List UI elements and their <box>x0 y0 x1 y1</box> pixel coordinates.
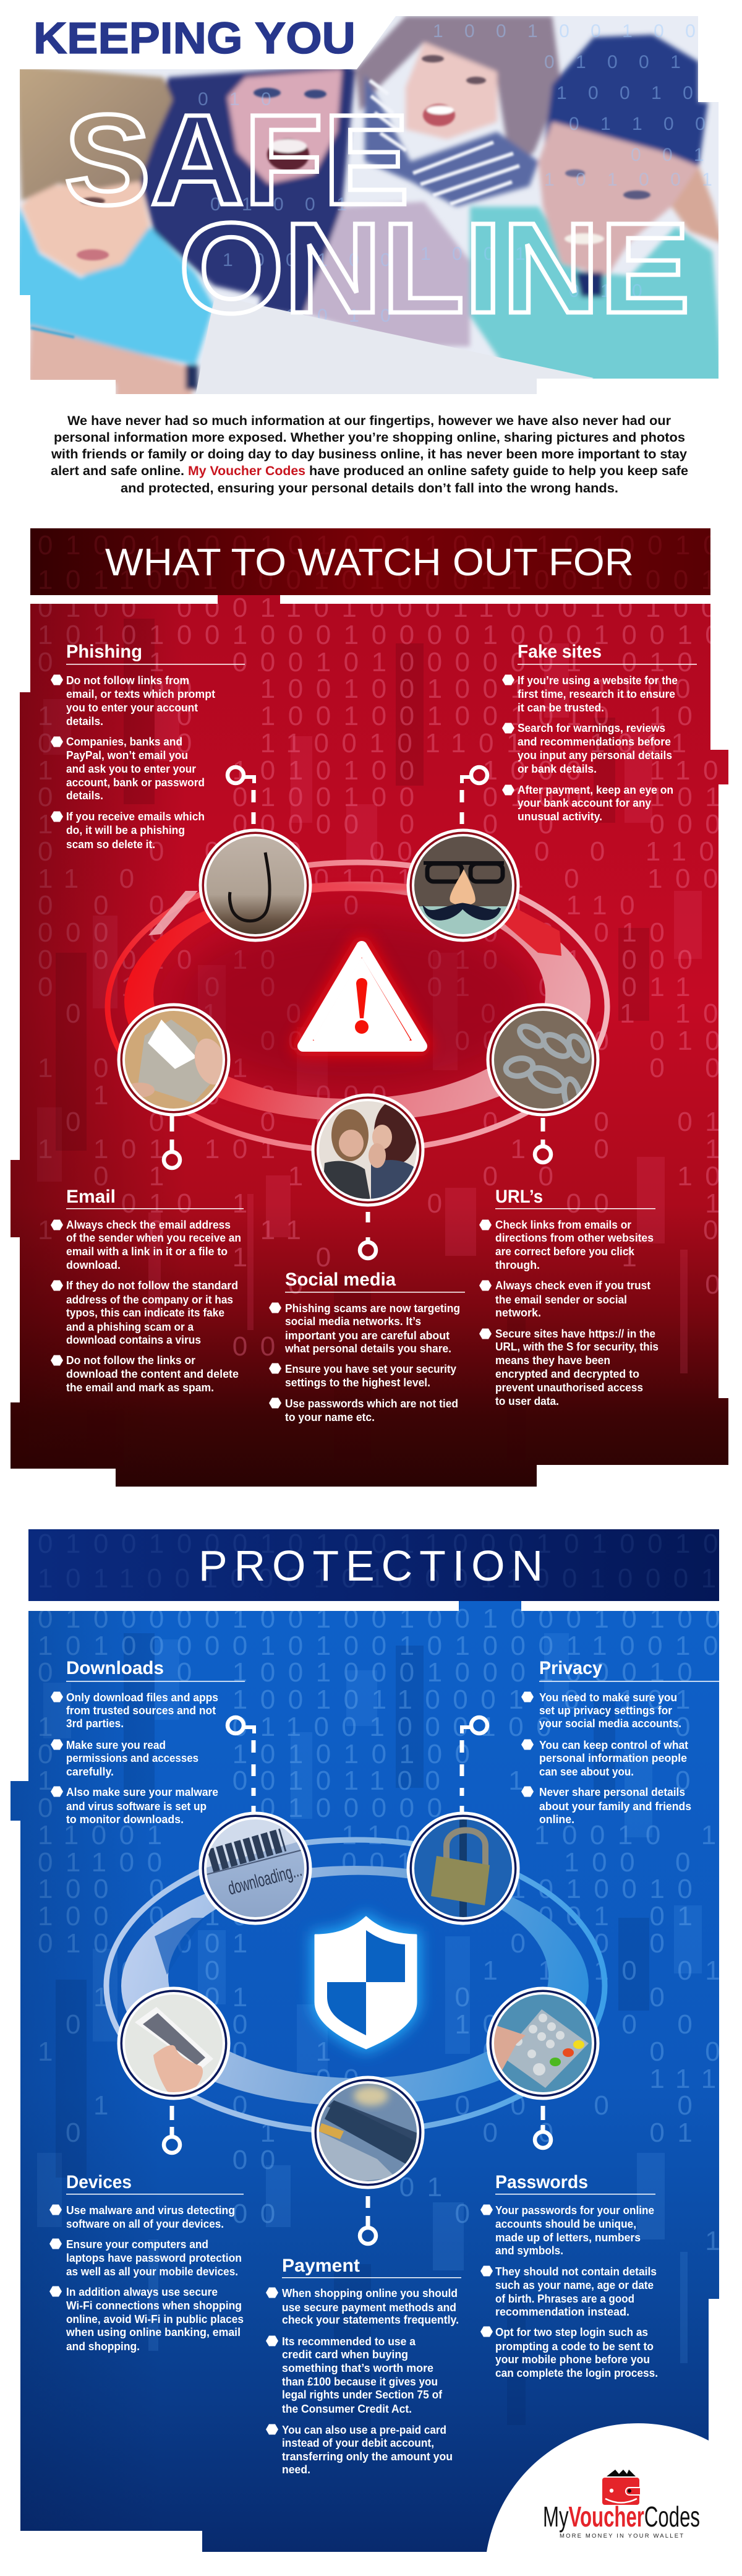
text block: fake sites <box>502 642 697 823</box>
panel: what to watch out for background: 1 0 11 0 <box>38 1215 731 1245</box>
text block: social media: what personal details you share. <box>284 1342 451 1355</box>
intro paragraph: We have never had so much information at our fingertips, however we have also never had our <box>67 414 671 428</box>
mother's dark hair <box>140 65 356 298</box>
text block: social media: Social media <box>285 1269 396 1290</box>
text block: privacy: set up privacy settings for <box>539 1704 672 1717</box>
hero photo with family: 0 1 0 0 1 <box>210 194 355 215</box>
photo circle: email envelope <box>119 1005 231 1115</box>
text block: passwords: of birth. Phrases are a good <box>495 2292 634 2305</box>
panel: protection background: 0100000100100100100010100 <box>38 1604 733 1634</box>
text block: email: Always check the email address <box>66 1218 231 1231</box>
panel: protection background: 00 0 <box>38 2199 733 2229</box>
connector: privacy <box>462 1717 487 1813</box>
text block: payment: something that’s worth more <box>282 2361 433 2374</box>
photo circle: fake disguise <box>408 830 519 940</box>
panel: protection background: 1010000010100101000110010 <box>38 1631 731 1661</box>
panel: what to watch out for background: 0 0100100 0100 101 <box>38 782 733 812</box>
text block: payment: use secure payment methods and <box>282 2301 456 2314</box>
text block: fake sites: Search for warnings, reviews <box>518 721 665 734</box>
laptop <box>195 298 594 396</box>
text block: downloads: permissions and accesses <box>66 1751 198 1764</box>
text block: devices: Use malware and virus detecting <box>66 2204 235 2217</box>
panel: protection background: 0 101010100 <box>38 1739 677 1769</box>
text block: email: address of the company or it has <box>66 1293 233 1306</box>
text block: devices: as well as all your mobile devices. <box>66 2265 238 2278</box>
panel: what to watch out for background: 0 0 0 0 0 0 1 110 <box>38 890 647 921</box>
hero photo with family: 1 0 0 1 0 0 1 0 0 1 <box>433 21 735 41</box>
hero photo with family: 1 0 0 1 <box>420 244 534 264</box>
text block: phishing: scam so delete it. <box>66 838 155 851</box>
logo: my voucher codes: MORE MONEY IN YOUR WALLET <box>560 2533 683 2540</box>
text block: email: of the sender when you receive an <box>66 1231 241 1244</box>
panel: protection background: 0 0 00 111 <box>38 2064 729 2094</box>
text block: urls: to user data. <box>495 1394 559 1407</box>
shield icon <box>315 1917 416 2048</box>
connector: passwords <box>535 2106 551 2148</box>
text block: fake sites: or bank details. <box>518 762 597 775</box>
text block: email: Email <box>66 1187 116 1207</box>
text block: devices: Devices <box>66 2172 132 2192</box>
text block: payment: When shopping online you should <box>282 2286 458 2299</box>
panel: protection background: 1011001000101000110010001 <box>38 1563 729 1594</box>
text block: fake sites: you input any personal details <box>518 749 672 762</box>
panel: protection background: 0 0100000 <box>38 1793 705 1823</box>
panel: protection background: 00 <box>38 2145 705 2175</box>
text block: passwords: Passwords <box>495 2172 588 2192</box>
intro paragraph: My Voucher Codes <box>188 464 305 478</box>
text block: downloads: Only download files and apps <box>66 1691 218 1704</box>
text block: passwords: Your passwords for your online <box>495 2204 654 2217</box>
text block: devices: when using online banking, email <box>66 2325 241 2338</box>
title: keeping you: KEEPING YOU <box>33 14 356 63</box>
panel: protection background: 01 0 1 1 10 01 <box>38 1956 733 1986</box>
text block: passwords <box>480 2172 658 2379</box>
text block: social media: Use passwords which are not tied <box>285 1397 458 1410</box>
connector: fake sites <box>462 767 487 824</box>
text block: urls: Check links from emails or <box>495 1218 631 1231</box>
text block: privacy: You need to make sure you <box>539 1691 677 1704</box>
connector: email <box>164 1113 180 1168</box>
logo: my voucher codes <box>543 2470 700 2540</box>
panel: protection background: 1 00101100 1 0 <box>38 1766 703 1796</box>
text block: social media: social media networks. It’s <box>285 1315 421 1328</box>
text block: payment: transferring only the amount you <box>282 2450 453 2463</box>
text block: phishing: Companies, banks and <box>66 735 182 748</box>
text block: fake sites: it can be trusted. <box>518 701 604 714</box>
ring arrows: red <box>108 862 607 1151</box>
text block: phishing: account, bank or password <box>66 776 205 789</box>
text block: devices: online, avoid Wi-Fi in public places <box>66 2312 244 2325</box>
text block: privacy: your social media accounts. <box>539 1717 681 1730</box>
text block: passwords: can complete the login process. <box>495 2366 658 2379</box>
photo circle: downloading bar: downloading... <box>226 1860 304 1899</box>
text block: payment <box>266 2256 461 2476</box>
text block: payment: You can also use a pre-paid card <box>282 2423 446 2436</box>
intro paragraph: and protected, ensuring your personal details don’t fall into the wrong hands. <box>121 481 618 496</box>
intro paragraph: personal information more exposed. Whether you’re shopping online, sharing pictures and photos <box>54 431 685 445</box>
panel: protection background: 0 010 100 1 0 0 <box>38 2009 733 2040</box>
text block: phishing: Do not follow links from <box>66 674 189 687</box>
ring arrows: blue <box>106 1840 605 2132</box>
text block: urls: Always check even if you trust <box>495 1279 650 1292</box>
text block: privacy: You can keep control of what <box>539 1738 688 1751</box>
text block: urls: directions from other websites <box>495 1231 654 1244</box>
text block: downloads: to monitor downloads. <box>66 1813 184 1826</box>
heading: protection: PROTECTION <box>198 1542 543 1590</box>
text block: passwords: recommendation instead. <box>495 2305 629 2318</box>
text block: email: the email and mark as spam. <box>66 1381 214 1394</box>
logo: my voucher codes: MyVoucherCodes <box>543 2501 700 2533</box>
panel: what to watch out for background: 1 1010100 1000 110 <box>38 755 731 786</box>
panel: what to watch out for background: 0100 00011010001100010100 <box>38 593 729 623</box>
photo circle: two women whispering <box>313 1095 424 1205</box>
text block: devices: and shopping. <box>66 2340 140 2353</box>
text block: email: download. <box>66 1258 121 1271</box>
text block: payment: Payment <box>282 2256 360 2276</box>
text block: phishing: you to enter your account <box>66 701 198 714</box>
text block: email: typos, this can indicate its fake <box>66 1306 224 1319</box>
panel: what to watch out for background: 11 0 000101 1 0 100 <box>38 864 731 894</box>
text block: payment: legal rights under Section 75 of <box>282 2388 443 2401</box>
panel: protection background: 1 1 01 0 1 0 <box>38 1982 733 2012</box>
text block: payment: the Consumer Credit Act. <box>282 2402 412 2415</box>
text block: payment: credit card when buying <box>282 2348 408 2361</box>
intro paragraph: with friends or family or doing day to day business online, it has never been more important to stay <box>51 447 687 462</box>
text block: urls: encrypted and decrypted to <box>495 1367 639 1380</box>
panel: what to watch out for background: 1 0 1 0 0 0 0 <box>38 1053 733 1083</box>
panel: protection background: 1 011001000100 0 <box>38 1712 703 1742</box>
panel: what to watch out for background: 1 100 1001001001 1100 <box>38 674 703 704</box>
connector: devices <box>164 2106 180 2153</box>
panel: protection background: 010 1001 0 0 0 <box>38 1928 677 1959</box>
text block: fake sites: Fake sites <box>518 642 602 662</box>
panel: what to watch out for background: 1 00000 0 0 0 000 <box>38 809 733 839</box>
text block: privacy: Privacy <box>539 1658 602 1678</box>
connector: downloads <box>228 1717 254 1813</box>
panel: what to watch out for background: 0 1 0 0 01 0 011 <box>38 972 703 1002</box>
title: safe: SAFE <box>64 88 409 232</box>
text block: phishing: do, it will be a phishing <box>66 823 185 836</box>
text block: fake sites: unusual activity. <box>518 810 602 823</box>
text block: privacy <box>521 1658 719 1826</box>
title: online: ONLINE <box>179 197 690 340</box>
panel: what to watch out for background <box>0 526 742 1491</box>
text block: privacy: can see about you. <box>539 1765 634 1778</box>
text block: urls: through. <box>495 1258 540 1271</box>
text block: email <box>51 1187 244 1394</box>
panel: what to watch out for background: 0 0 0 00 0 0 01 <box>38 1107 733 1137</box>
panel: what to watch out for background: 1010100100010000100010010 <box>38 620 733 650</box>
panel: protection background: 01 <box>38 2172 705 2202</box>
text block: payment: than £100 because it gives you <box>282 2375 438 2388</box>
panel: what to watch out for background: 0 0 <box>38 1269 733 1300</box>
photo circle: keypad <box>488 1988 600 2098</box>
text block: privacy: online. <box>539 1813 574 1826</box>
connector: phishing <box>228 767 254 824</box>
text block: downloads: 3rd parties. <box>66 1717 124 1730</box>
text block: fake sites: If you’re using a website for the <box>518 674 678 687</box>
panel: what to watch out for background: 0 11 0 0 1 1 10 <box>38 998 731 1029</box>
intro paragraph: alert and safe online. <box>51 464 184 478</box>
panel: what to watch out for background: 00 <box>38 1331 705 1362</box>
panel: what to watch out for background: 0 0010 10 010 1 000 <box>38 945 705 975</box>
text block: phishing: Phishing <box>66 642 142 662</box>
text block: devices: software on all of your devices. <box>66 2217 224 2230</box>
text block: social media: Ensure you have set your security <box>285 1362 457 1375</box>
panel: protection background: 1 <box>38 2226 733 2256</box>
panel: protection background: 100 0 10 0 001 01 <box>38 1901 705 1931</box>
warning triangle icon <box>303 947 422 1046</box>
text block: urls <box>479 1187 659 1407</box>
hero photo with family: 0 1 1 0 0 0 <box>569 114 742 134</box>
text block: privacy: Never share personal details <box>539 1785 685 1798</box>
panel: what to watch out for background: 0100100010100110001010010 <box>38 530 731 560</box>
text block: downloads: and virus software is set up <box>66 1800 207 1813</box>
text block: urls: the email sender or social <box>495 1293 627 1306</box>
text block: devices: laptops have password protection <box>66 2251 242 2264</box>
text block: privacy: personal information people <box>539 1751 687 1764</box>
text block: passwords: They should not contain details <box>495 2265 657 2278</box>
hero photo with family: 1 0 0 1 0 0 <box>223 250 399 270</box>
panel: protection background: 10010110001 0 101 <box>38 1685 703 1715</box>
text block: urls: URL’s <box>495 1187 543 1207</box>
inner dark glow <box>170 916 541 1089</box>
text block: fake sites: and recommendations before <box>518 735 671 748</box>
panel: what to watch out for background: 1 0 0 000 0 <box>38 1080 705 1110</box>
text block: urls: means they have been <box>495 1354 610 1367</box>
hero photo with family: 0 1 0 <box>198 89 279 109</box>
text block: social media: to your name etc. <box>285 1410 375 1423</box>
text block: urls: URL, with the S for security, this <box>495 1340 659 1353</box>
panel: protection background: 0 1 0 0 0 01 <box>38 2118 705 2148</box>
hero photo with family <box>20 16 719 394</box>
photo circle: downloading bar <box>200 1813 310 1923</box>
text block: passwords: Opt for two step login such as <box>495 2325 648 2338</box>
text block: email: email with a link in it or a file to <box>66 1245 228 1258</box>
text block: email: download the content and delete <box>66 1367 239 1380</box>
text block: passwords: accounts should be unique, <box>495 2217 636 2230</box>
hero photo with family: 0 0 1 0 <box>631 145 742 165</box>
panel: what to watch out for background: 1 0 1001001001010 10 <box>38 701 705 731</box>
panel: what to watch out for background: 0 0 1100101101 1011 <box>38 728 699 758</box>
panel: protection background: 1 0 1 0 0 0 0 <box>38 2037 733 2067</box>
text block: payment: instead of your debit account, <box>282 2436 434 2449</box>
photo circle: credit cards <box>313 2077 427 2187</box>
connector: payment <box>360 2196 376 2244</box>
text block: downloads: carefully. <box>66 1765 114 1778</box>
text block: downloads: Also make sure your malware <box>66 1785 218 1798</box>
text block: email: If they do not follow the standard <box>66 1279 238 1292</box>
panel: what to watch out for background: 0 1 1 0 0 10 <box>38 1161 733 1191</box>
panel: what to watch out for background: 0 0 0110 0011 0 0 110 <box>38 836 727 867</box>
text block: privacy: about your family and friends <box>539 1800 691 1813</box>
intro paragraph: have produced an online safety guide to help you keep safe <box>309 464 688 478</box>
photo circle: smartphone in hand <box>119 1988 229 2100</box>
text block: passwords: your mobile phone before you <box>495 2353 650 2366</box>
text block: downloads: from trusted sources and not <box>66 1704 216 1717</box>
connector: urls <box>535 1118 551 1162</box>
panel: what to watch out for background: 010 1 0 00 1 <box>38 1188 733 1219</box>
text block: email: download contains a virus <box>66 1333 201 1346</box>
icon: wallet <box>602 2470 641 2505</box>
text block: devices: In addition always use secure <box>66 2285 218 2298</box>
text block: phishing: details. <box>66 715 103 728</box>
photo circle: padlock <box>408 1813 519 1923</box>
text block: phishing: If you receive emails which <box>66 810 205 823</box>
panel: protection background: 01100 1 00100 100 0 <box>38 1847 703 1878</box>
text block: social media: Phishing scams are now targeting <box>285 1302 460 1315</box>
heading: what to watch out for: WHAT TO WATCH OUT FOR <box>105 541 634 584</box>
panel: protection background: 100 0 1 1010010 <box>38 1874 705 1904</box>
panel: what to watch out for background: 0 1 00 00 1 0 010 <box>38 1026 733 1056</box>
text block: urls: Secure sites have https:// in the <box>495 1327 655 1340</box>
text block: passwords: prompting a code to be sent to <box>495 2340 654 2353</box>
text block: phishing: PayPal, won’t email you <box>66 749 188 762</box>
text block: downloads: Make sure you read <box>66 1738 166 1751</box>
hero photo with family: 0 1 0 <box>569 281 650 301</box>
text block: social media <box>269 1269 465 1423</box>
text block: social media: important you are careful about <box>285 1329 450 1342</box>
text block: payment: need. <box>282 2463 310 2476</box>
text block: passwords: made up of letters, numbers <box>495 2231 641 2244</box>
panel: protection background: 1 0 0 0 0 0 <box>38 2090 705 2121</box>
text block: payment: Its recommended to use a <box>282 2335 416 2348</box>
panel: protection background: 0100100010100110001010010 <box>38 1529 731 1559</box>
photo circle: phishing hook <box>200 830 310 940</box>
text block: email: Do not follow the links or <box>66 1354 195 1367</box>
panel: protection background: 0 0 10010001000100010 <box>38 1657 705 1688</box>
text block: urls: network. <box>495 1306 541 1319</box>
photo circle: chain links <box>488 1005 600 1115</box>
text block: fake sites: your bank account for any <box>518 796 652 809</box>
text block: downloads <box>51 1658 245 1826</box>
text block: fake sites: first time, research it to ensure <box>518 687 675 700</box>
text block: phishing: and ask you to enter your <box>66 762 196 775</box>
panel: what to watch out for background: 1011001000101000110010001 <box>38 565 729 595</box>
text block: devices <box>49 2172 244 2353</box>
panel: protection background: 11001 110100 10010 1 <box>38 1820 729 1850</box>
text block: passwords: and symbols. <box>495 2244 563 2257</box>
panel: what to watch out for background: 1 0 1 <box>38 1242 733 1273</box>
connector: social media <box>360 1212 376 1258</box>
hero photo with family: 0 0 1 0 1 0 <box>223 306 399 326</box>
text block: passwords: such as your name, age or date <box>495 2278 654 2291</box>
text block: urls: are correct before you click <box>495 1245 635 1258</box>
panel: what to watch out for background: 0 1 0001010000001 010 <box>38 647 705 677</box>
text block: phishing <box>51 642 245 851</box>
text block: fake sites: After payment, keep an eye on <box>518 783 673 796</box>
text block: urls: prevent unauthorised access <box>495 1381 643 1394</box>
panel: protection background <box>0 1528 742 2555</box>
text block: email: and a phishing scam or a <box>66 1320 194 1333</box>
panel: what to watch out for background: 1 101 101 1 0 1 <box>38 1134 733 1164</box>
text block: phishing: details. <box>66 789 103 802</box>
text block: payment: check your statements frequently. <box>282 2313 459 2326</box>
text block: downloads: Downloads <box>66 1658 164 1678</box>
intro paragraph <box>51 414 688 496</box>
text block: devices: Wi-Fi connections when shopping <box>66 2299 242 2312</box>
text block: social media: settings to the highest level. <box>285 1376 430 1389</box>
panel: what to watch out for background: 000 0 0 0 0 010 <box>38 917 677 948</box>
text block: devices: Ensure your computers and <box>66 2238 208 2251</box>
text block: phishing: email, or texts which prompt <box>66 687 215 700</box>
